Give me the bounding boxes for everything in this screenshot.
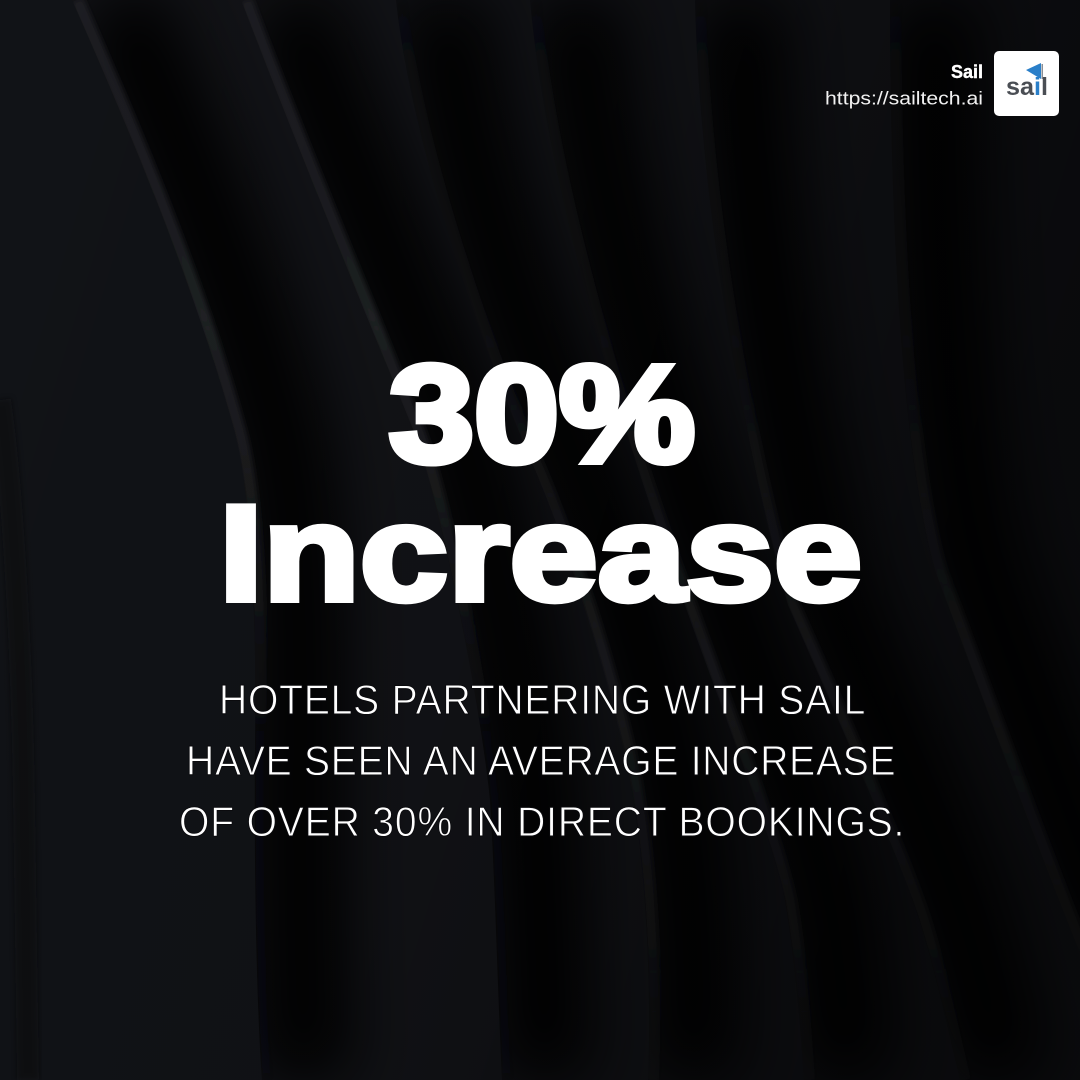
headline: 30% Increase: [219, 338, 862, 629]
brand header: [825, 51, 1059, 116]
body line 1: HOTELS PARTNERING WITH SAIL: [219, 676, 865, 723]
icon: sail logo: [994, 51, 1059, 116]
icon: sail logo: sail: [1006, 73, 1048, 101]
headline line 1: 30%: [389, 338, 695, 492]
headline line 2: Increase: [219, 477, 862, 629]
body text: [179, 676, 904, 845]
body line 3: OF OVER 30% IN DIRECT BOOKINGS.: [179, 798, 904, 845]
brand url: https://sailtech.ai: [825, 88, 983, 108]
brand name: Sail: [951, 62, 983, 82]
body line 2: HAVE SEEN AN AVERAGE INCREASE: [186, 737, 896, 784]
